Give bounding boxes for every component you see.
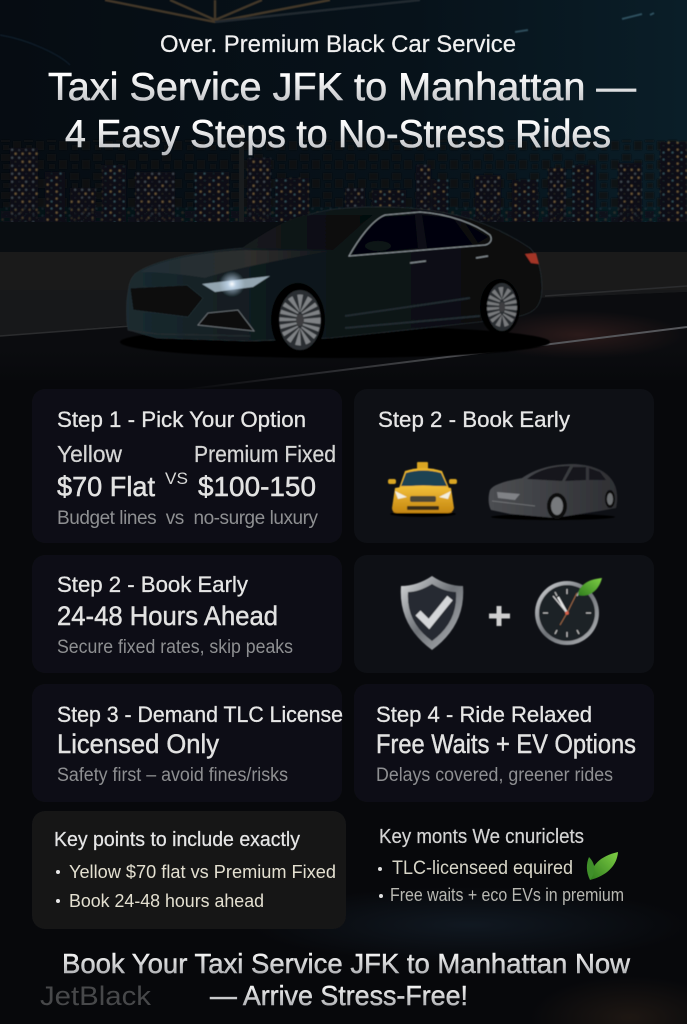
sidewalk	[0, 290, 687, 336]
note: Secure fixed rates, skip peaks	[57, 637, 293, 658]
big statement: Licensed Only	[57, 729, 219, 759]
vs: VS	[165, 469, 188, 488]
road lines	[0, 286, 687, 391]
scene fade into page	[0, 350, 687, 390]
hood reflection	[140, 250, 330, 278]
tail light	[525, 253, 539, 264]
title block	[48, 31, 637, 156]
panel: step 4 ride relaxed	[354, 684, 654, 802]
road glow	[475, 311, 685, 359]
mirror	[365, 241, 391, 251]
rear wheel	[480, 279, 520, 335]
icon: clock with leaf	[535, 578, 602, 645]
big statement: Free Waits + EV Options	[376, 729, 636, 759]
panel: key points left	[32, 811, 346, 929]
eyebrow: Over. Premium Black Car Service	[160, 31, 516, 58]
icon: yellow taxi	[388, 462, 457, 517]
call to action	[62, 948, 630, 1011]
big statement: 24-48 Hours Ahead	[57, 601, 278, 631]
concrete wall	[0, 252, 687, 290]
key points right	[378, 826, 624, 905]
hero photo scene	[0, 0, 687, 391]
night sky	[0, 0, 687, 250]
shadow	[120, 326, 550, 358]
headline line 2: 4 Easy Steps to No-Stress Rides	[65, 113, 611, 156]
road	[0, 292, 687, 380]
icon: shield with check	[401, 576, 463, 650]
bullet 1: Yellow $70 flat vs Premium Fixed	[69, 861, 336, 882]
lower intake	[198, 310, 254, 331]
bumper lip	[128, 330, 250, 336]
panel: step 1 pick your option	[32, 389, 342, 543]
icon: green leaf	[587, 852, 618, 880]
note: Safety first – avoid fines/risks	[57, 765, 288, 786]
bullet 1: TLC-licenseed equired	[392, 858, 573, 879]
panel: shield plus clock icons	[354, 555, 654, 673]
heading: Step 2 - Book Early	[378, 407, 571, 432]
car body	[126, 207, 542, 341]
icon: plus	[489, 606, 510, 626]
lower background glows	[250, 887, 687, 1024]
bullet 2: Book 24-48 hours ahead	[69, 890, 264, 911]
bullet 2: Free waits + eco EVs in premium	[390, 885, 624, 905]
city skyline	[0, 140, 687, 226]
headlight	[202, 276, 270, 292]
door handles	[410, 256, 488, 263]
logo: JetBlack: JetBlack	[40, 981, 152, 1011]
icon: dark premium car	[489, 464, 617, 520]
comparison note: Budget lines vs no-surge luxury	[57, 508, 318, 529]
heading: Step 4 - Ride Relaxed	[376, 702, 592, 727]
note: Delays covered, greener rides	[376, 765, 613, 786]
heading: Key monts We cnuriclets	[379, 826, 584, 848]
premium label: Premium Fixed	[194, 441, 336, 467]
front wheel	[271, 283, 325, 357]
line 2: — Arrive Stress-Free!	[210, 980, 468, 1011]
panel: step 2 book early	[32, 555, 342, 673]
premium price: $100-150	[198, 471, 316, 502]
sill highlight	[345, 298, 480, 328]
overhead truss	[105, 0, 420, 22]
heading: Step 1 - Pick Your Option	[57, 407, 306, 432]
side windows	[352, 215, 488, 255]
yellow price: $70 Flat	[57, 471, 155, 502]
lamp post	[239, 125, 244, 253]
panel: step 2 vehicles	[354, 389, 654, 543]
hero black sedan	[120, 207, 550, 358]
grille	[130, 285, 203, 317]
panel: step 3 demand TLC license	[32, 684, 343, 802]
windshield	[243, 215, 373, 250]
heading: Key points to include exactly	[54, 828, 301, 851]
heading: Step 3 - Demand TLC License	[57, 702, 343, 727]
heading: Step 2 - Book Early	[57, 572, 249, 597]
yellow label: Yellow	[57, 441, 122, 467]
line 1: Book Your Taxi Service JFK to Manhattan Now	[62, 948, 630, 979]
headline line 1: Taxi Service JFK to Manhattan —	[48, 66, 637, 109]
sky streaks	[0, 13, 654, 65]
fence	[0, 222, 687, 252]
chrome trim	[349, 212, 491, 256]
